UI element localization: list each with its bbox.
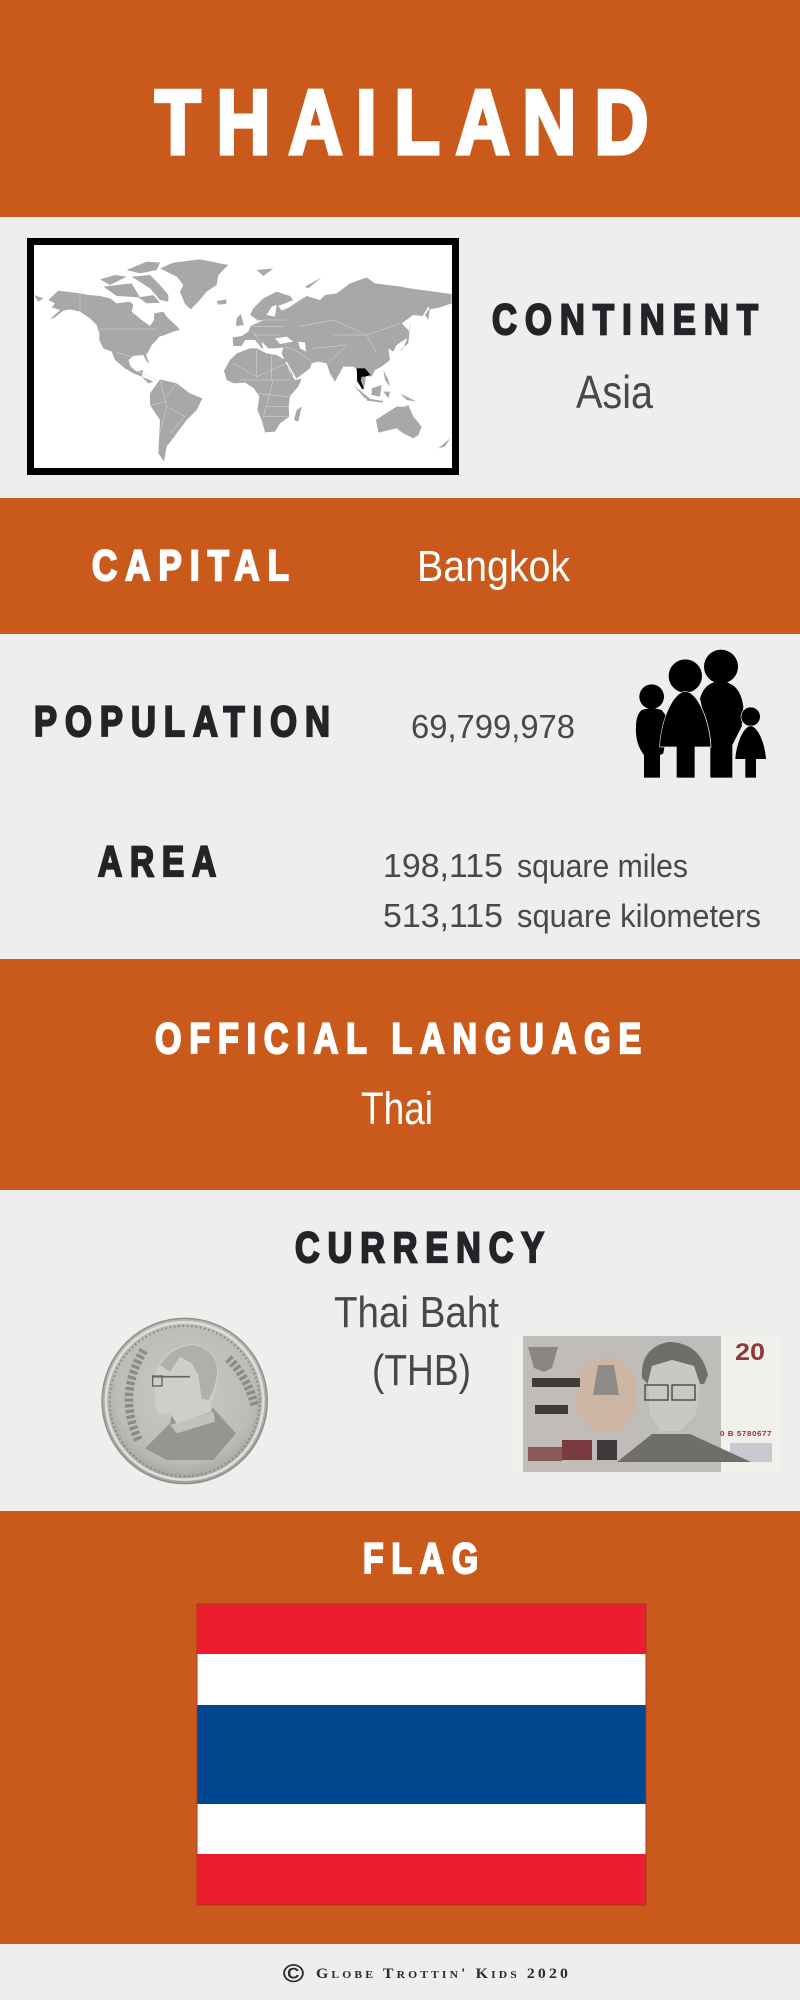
footer credit <box>0 1944 800 2000</box>
area values <box>383 847 761 934</box>
population heading: POPULATION <box>34 698 338 746</box>
population value: 69,799,978 <box>411 708 575 745</box>
area values: 198,115 <box>383 847 503 884</box>
panel: title band <box>0 0 800 217</box>
icon: coin <box>102 1318 267 1484</box>
area values: 513,115 <box>383 897 503 934</box>
panel: currency <box>0 1190 800 1511</box>
currency value: Thai Baht <box>334 1288 499 1337</box>
continent value: Asia <box>576 366 653 418</box>
panel: population and area <box>0 634 800 959</box>
language heading: OFFICIAL LANGUAGE <box>155 1015 649 1063</box>
flag of Thailand <box>197 1604 646 1905</box>
icon: family silhouette <box>636 650 766 778</box>
world map with Thailand highlighted <box>30 242 456 472</box>
banknote denomination: 20 <box>735 1339 765 1366</box>
panel: official language <box>0 959 800 1190</box>
banknote serial: 0 B 5780677 <box>720 1431 772 1438</box>
icon: copyright: © <box>283 1960 305 1988</box>
area heading: AREA <box>98 838 224 886</box>
currency heading: CURRENCY <box>295 1224 552 1272</box>
area values: square kilometers <box>517 898 761 934</box>
panel: capital <box>0 498 800 634</box>
language value: Thai <box>361 1083 433 1134</box>
icon: banknote <box>516 1336 780 1473</box>
area values: square miles <box>517 848 688 884</box>
currency value <box>334 1288 499 1395</box>
panel: continent <box>0 217 800 498</box>
flag heading: FLAG <box>363 1535 486 1583</box>
footer text: Globe Trottin' Kids 2020 <box>316 1966 571 1982</box>
capital value: Bangkok <box>417 542 571 591</box>
capital heading: CAPITAL <box>92 542 297 590</box>
currency value: (THB) <box>372 1346 471 1395</box>
title: THAILAND <box>155 71 648 173</box>
panel: flag <box>0 1511 800 1944</box>
